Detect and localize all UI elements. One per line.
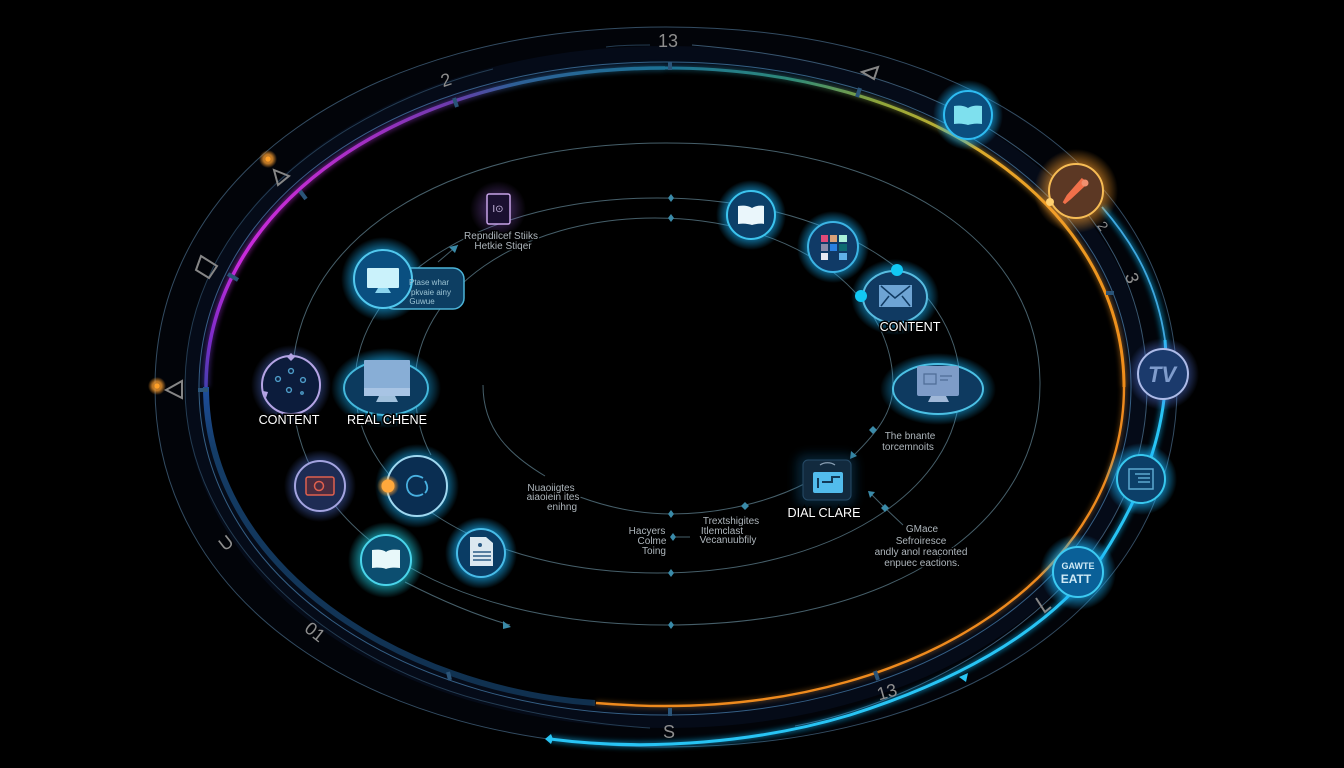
label 13 top: 13 [658, 31, 678, 51]
label: centre notes [700, 516, 759, 546]
label: DIAL CLARE: DIAL CLARE [787, 506, 861, 520]
orange dot left [148, 377, 166, 395]
node: document lower [445, 517, 517, 589]
node: orange pen [1034, 149, 1118, 233]
node: real chene monitor [331, 348, 441, 428]
main ring: top-right gradient arc [665, 68, 1124, 387]
label: centre notes: Vecanuubfily [700, 535, 756, 546]
label: far left centre notes [527, 483, 579, 513]
label S: S [663, 722, 675, 742]
node: list [1105, 443, 1177, 515]
label: lower right note: Sefroiresce [896, 536, 947, 547]
label: top doc note: Hetkie Stiqer [474, 241, 532, 252]
label: monitor note [882, 431, 936, 453]
outer ring system [155, 27, 1177, 747]
node: monitor right [880, 353, 996, 425]
label 2 right: 2 [1094, 218, 1112, 234]
label: far left centre notes: aiaoiein ites [527, 492, 579, 503]
label: monitor note: The bnante [885, 431, 936, 442]
label: centre notes: Trextshigites [703, 516, 759, 527]
node: app grid [797, 211, 869, 283]
second ring with gaps for labels [185, 45, 650, 728]
node: monitor with callout panel: Guwue [409, 297, 435, 306]
orange dot upper [259, 150, 277, 168]
label: centre notes: Itlemclast [701, 526, 743, 537]
navy inner band [185, 46, 1147, 728]
label: far left centre notes: enihng [547, 502, 577, 513]
label 01: 01 [301, 618, 329, 646]
main ring: top-left magenta arc [206, 68, 665, 387]
node: red badge [284, 450, 356, 522]
label: left centre notes: Colme [638, 536, 667, 547]
node: monitor with callout panel: pkvaie ainy [411, 288, 451, 297]
marker square [196, 256, 217, 278]
label 2: 2 [438, 69, 454, 91]
marker triangle left [166, 381, 182, 398]
label: monitor note: torcemnoits [882, 442, 934, 453]
label: left centre notes [629, 526, 667, 557]
ring tick marks [198, 62, 1114, 716]
label 3: 3 [1121, 270, 1143, 286]
marker corner [1036, 598, 1051, 612]
third ring [199, 62, 1131, 715]
node: mail [851, 259, 939, 335]
main ring: bottom-left navy arc [206, 387, 595, 703]
node: book lower left [348, 522, 424, 598]
orbit waypoints and arrowheads [449, 194, 889, 629]
node: monitor with callout panel: Ptase whar [409, 278, 449, 287]
node: inner book [716, 180, 786, 250]
label: top doc note: Repndilcef Stiiks [464, 231, 538, 242]
node: TV: TV [1148, 362, 1178, 387]
label 13 bottom: 13 [875, 680, 899, 704]
bright blue arc [545, 207, 1166, 745]
callout panel [383, 268, 464, 309]
arc waypoint [959, 673, 968, 682]
label: lower right note [875, 524, 967, 569]
doc icon top [470, 181, 526, 237]
node: content circle [251, 345, 331, 425]
main ring: bottom-right orange arc [596, 387, 1124, 706]
label: lower right note: GMace [906, 524, 939, 535]
label: lower right note: andly anol reaconted [875, 547, 967, 558]
second ring right side [692, 45, 1147, 726]
node: dial clare tile [796, 454, 856, 506]
node: EATT: EATT [1061, 572, 1092, 586]
label: REAL CHENE: REAL CHENE [347, 413, 427, 427]
interior [206, 68, 1124, 706]
label: left centre notes: Hacyers [629, 526, 665, 537]
label: far left centre notes: Nuaoiigtes [527, 483, 575, 494]
arc end point [545, 734, 553, 744]
marker triangle top right [862, 67, 878, 79]
label: left centre notes: Toing [642, 546, 666, 557]
dark band between outer ring and main ring [155, 27, 1177, 747]
node: TV [1127, 338, 1199, 410]
label U: U [215, 531, 237, 555]
label: CONTENT right: CONTENT [880, 320, 941, 334]
label: top doc note [464, 231, 538, 252]
label: lower right note: enpuec eactions. [884, 558, 960, 569]
orange node dot [377, 475, 399, 497]
ring labels and markers [148, 31, 1143, 742]
label: CONTENT left: CONTENT [259, 413, 320, 427]
node: monitor with callout panel [341, 237, 464, 321]
node: EATT: GAWTE [1062, 561, 1094, 571]
outermost thin ring [155, 27, 1177, 747]
node: refresh circle [375, 444, 459, 528]
node: book top right [933, 80, 1003, 150]
marker triangle upper left [274, 170, 289, 185]
inner orbit lines [292, 143, 1040, 625]
doc icon top: I⊙ [492, 204, 504, 215]
node: EATT [1040, 534, 1116, 610]
